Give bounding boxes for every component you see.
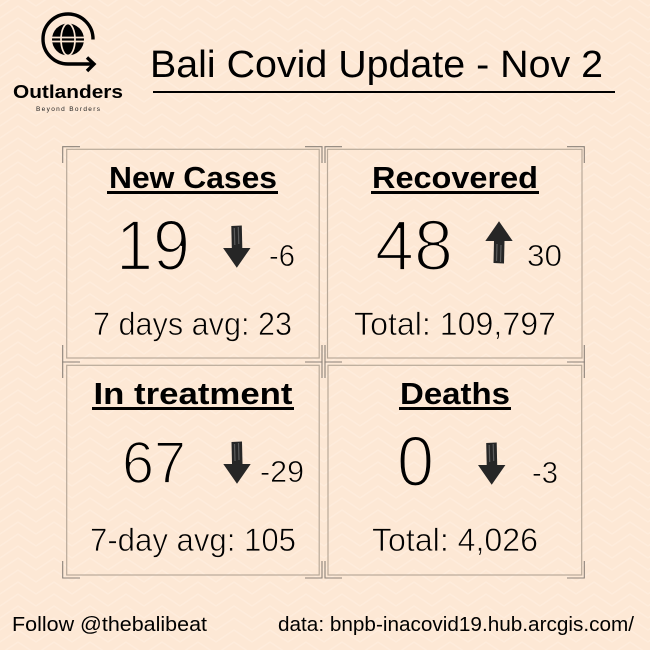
number: 48: 48 (375, 207, 453, 286)
panel: deaths (325, 362, 584, 578)
heading: new cases: New Cases (109, 160, 277, 195)
icon: down arrow (223, 226, 250, 268)
logo wordmark: Outlanders (13, 81, 123, 102)
logo tagline: Beyond Borders (36, 106, 101, 113)
stat: 7 days avg: 7 days avg: 23 (93, 306, 292, 342)
change: -3: -3 (532, 455, 558, 490)
panel: recovered (325, 147, 584, 362)
icon: down arrow (223, 442, 251, 484)
heading: in treatment: In treatment (94, 376, 292, 411)
number: 19: 19 (116, 207, 190, 286)
icon: globe with arrow (43, 14, 94, 71)
icon: down arrow (478, 442, 505, 485)
stat: 7-day avg: 7-day avg: 105 (90, 522, 296, 558)
heading: recovered: Recovered (372, 160, 538, 195)
icon: up arrow (485, 221, 513, 264)
footer: follow: Follow @thebalibeat (12, 614, 207, 636)
panel: in treatment (63, 362, 322, 578)
change: -29: -29 (260, 454, 304, 489)
stat: total recovered: Total: 109,797 (354, 306, 556, 342)
number: 0: 0 (397, 423, 434, 502)
logo: Outlanders (13, 14, 123, 113)
stat: total deaths: Total: 4,026 (372, 522, 538, 558)
change: -6: -6 (269, 238, 295, 273)
panel: new cases (63, 147, 322, 362)
change: 30: 30 (527, 238, 562, 273)
title: Bali Covid Update - Nov 2 (150, 44, 603, 86)
heading: deaths: Deaths (400, 376, 510, 411)
number: 67: 67 (122, 430, 186, 496)
footer: data source: data: bnpb-inacovid19.hub.arcgis.com/ (278, 614, 634, 636)
